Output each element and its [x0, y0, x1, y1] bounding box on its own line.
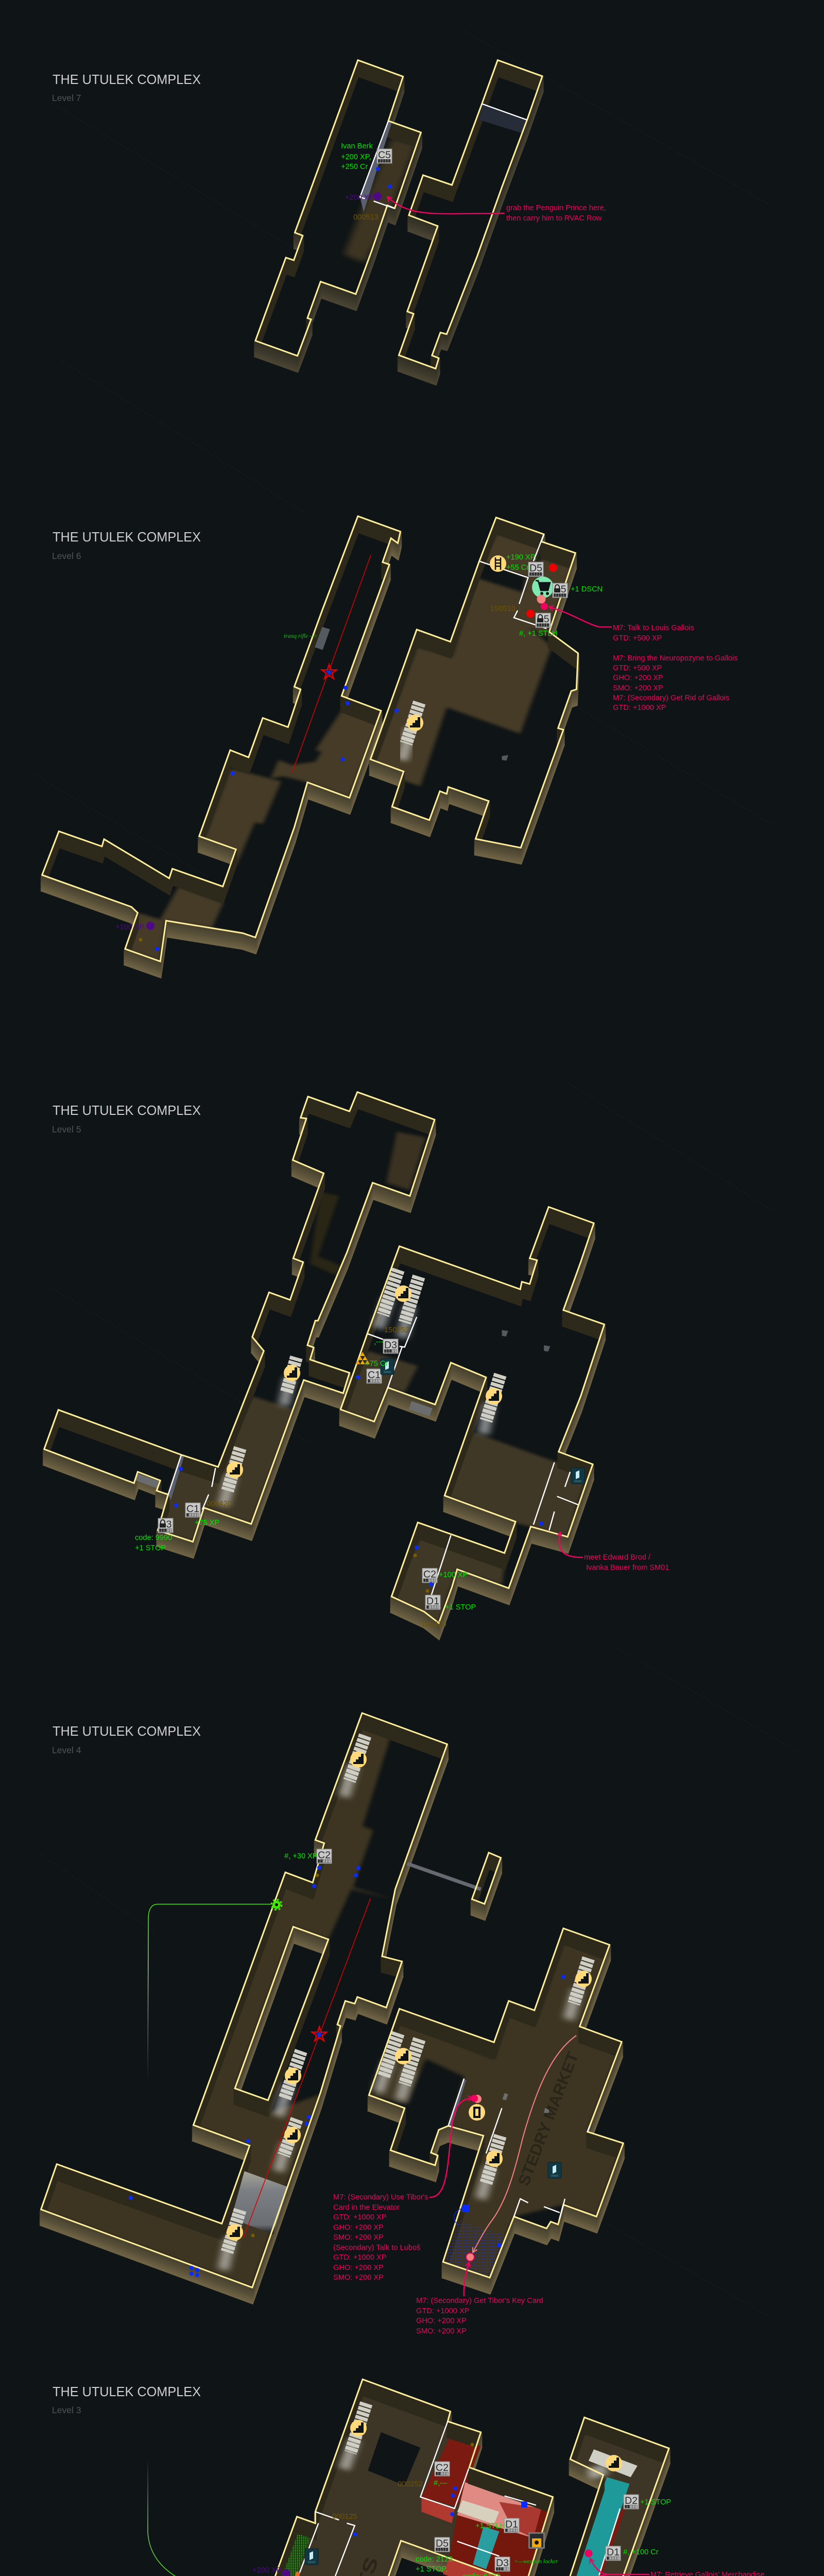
mission note: meet Edward Brod / [584, 1553, 651, 1562]
title: level 4: THE UTULEK COMPLEX [53, 1724, 201, 1739]
loot note near ladder: +190 XP, [506, 553, 537, 562]
green loot notes: +75 Cr [365, 1360, 388, 1368]
arrow to Edward Brod [559, 1532, 583, 1557]
device tile C2 north: C2 [436, 2462, 449, 2473]
green loot notes: +1 STOP [640, 2498, 671, 2506]
mission list: Tibor's card: GTD: +1000 XP [333, 2253, 386, 2262]
green loot note: Ivan Berk [341, 142, 373, 150]
gas connector line lower [148, 2459, 270, 2576]
green loot notes: +1 STOP, [416, 2565, 448, 2573]
ladder icon [490, 555, 506, 572]
safe loot note: #, +1 STLH [519, 630, 557, 638]
mission list: Tibor's card: GTD: +1000 XP [333, 2213, 386, 2222]
mission list: key card: GTD: +1000 XP [416, 2307, 469, 2315]
safe tile 3 [158, 1518, 173, 1533]
title: level 4 [52, 1724, 201, 1755]
mission list: M7: Talk to Louis Gallois [613, 624, 694, 632]
mission list: M7: Bring the Neuropozyne to Gallois [613, 654, 738, 663]
mission marker near elevator [471, 2095, 482, 2103]
title: level 7 [52, 73, 201, 103]
triangle code [355, 1352, 370, 1364]
device tile D3 [495, 2557, 510, 2571]
panel: level 5 [44, 1092, 669, 1638]
device tile C5: C5 [378, 149, 391, 161]
device tile D1 [504, 2518, 519, 2533]
safe tile lower [536, 613, 551, 628]
green loot notes: +1 STLH [475, 2522, 505, 2530]
exploration XP label: +100 XP [115, 923, 144, 931]
code numbers: 150420 [421, 1620, 447, 1629]
stairs icons [227, 1285, 502, 1478]
mission list: M7: (Secondary) Get Rid of Gallois [613, 694, 729, 702]
safe tile upper [553, 583, 568, 598]
C2 loot note: #, +30 XP [284, 1852, 318, 1860]
mission list: SMO: +200 XP [613, 684, 663, 692]
device tile D5 [435, 2537, 450, 2552]
title: level 5: Level 5 [52, 1124, 81, 1134]
mission list: GTD: +500 XP [613, 664, 662, 672]
loot note near ladder: +55 Cr [506, 564, 529, 572]
panel: level 6 [42, 516, 738, 977]
praxis kit icon [528, 2532, 545, 2549]
title: level 3: Level 3 [52, 2405, 81, 2415]
code number: 150510 [490, 605, 516, 613]
device tile D5: D5 [529, 563, 542, 574]
title: level 4: Level 4 [52, 1745, 81, 1755]
code numbers: 000252 [398, 2480, 423, 2488]
green loot notes: #,--- [434, 2479, 448, 2487]
mission list: GTD: +500 XP [613, 634, 662, 642]
green loot note: +200 XP, [341, 153, 371, 161]
device tile C2 [422, 1568, 437, 1583]
elevator icon [469, 2104, 485, 2121]
device tile D2 east: D2 [625, 2495, 638, 2506]
device tile C1 left [185, 1503, 200, 1517]
mission list: Tibor's card: Card in the Elevator [333, 2204, 400, 2212]
remote hacking dots and exploration bonus [373, 167, 392, 200]
mission list: key card: SMO: +200 XP [416, 2327, 467, 2335]
title: level 5 [52, 1104, 201, 1134]
salmon route arrow [473, 2036, 576, 2252]
green loot notes [135, 1338, 476, 1612]
code numbers [207, 1326, 447, 1629]
green loot notes [301, 2479, 671, 2576]
device tile D3 [383, 1339, 398, 1353]
green loot notes: code: 2123 [416, 2555, 453, 2564]
arrow to elevator [430, 2098, 473, 2197]
device tile D3: D3 [496, 2557, 509, 2569]
device tile C2: C2 [423, 1569, 436, 1580]
mission list: key card: M7: (Secondary) Get Tibor's Key Card [416, 2297, 543, 2305]
panel: level 3 [52, 2379, 765, 2576]
device tile D1: D1 [505, 2519, 518, 2530]
mission note: grab the Penguin Prince here, [506, 204, 606, 212]
device tile D1 east [606, 2546, 621, 2561]
device tile C1 left: C1 [186, 1503, 199, 1515]
exploration XP label: +200 XP [345, 194, 374, 202]
title: level 6 [52, 530, 201, 561]
e-books [381, 1359, 585, 1484]
title: level 3 [52, 2385, 201, 2415]
device tile D1: D1 [426, 1596, 439, 1607]
stairs icons [284, 2420, 622, 2576]
map: level 7 [255, 60, 542, 384]
safe tile lower: 5 [544, 614, 550, 625]
stairs icons [227, 1751, 592, 2241]
remote hacking and pocket dots [174, 1375, 543, 1593]
device tile D3: D3 [384, 1340, 397, 1351]
title: level 3: THE UTULEK COMPLEX [53, 2385, 201, 2399]
remote hacking and pocket dots [129, 1866, 565, 2277]
mission list: key card: GHO: +200 XP [416, 2317, 467, 2325]
remote hacking dots [139, 686, 399, 951]
code numbers: 000420 [207, 1500, 232, 1508]
map: level 5 [44, 1092, 604, 1638]
map: level 3 [246, 2379, 669, 2576]
green loot notes: code: 9990 [135, 1534, 172, 1542]
mission markers [293, 2549, 592, 2576]
gas connector line upper [148, 1904, 271, 2081]
e-books [305, 2549, 554, 2576]
mission list: Tibor's card: GHO: +200 XP [333, 2224, 384, 2232]
mission list: Tibor's card: GHO: +200 XP [333, 2264, 384, 2272]
loot DSCN: +1 DSCN [571, 585, 603, 594]
code numbers: 150252 [384, 1326, 409, 1334]
arrow to penguin prince [387, 197, 505, 214]
green loot notes: +75 XP [195, 1519, 219, 1527]
tranq rifle note: tranq rifle --> [284, 633, 317, 639]
title: level 6: THE UTULEK COMPLEX [53, 530, 201, 545]
stairs icon [407, 715, 423, 731]
green loot notes: +1 STOP [135, 1544, 166, 1552]
mission note: Ivanka Bauer from SM01 [586, 1564, 669, 1572]
device tile D5 [528, 562, 543, 577]
panel: level 4 [41, 1713, 623, 2335]
mission list: GTD: +1000 XP [613, 704, 666, 712]
arrows to merchandise [583, 2558, 649, 2576]
pocket secretary code: 000513 [353, 213, 379, 222]
device tile C2 north [435, 2462, 450, 2476]
mission list: GHO: +200 XP [613, 674, 663, 682]
device tile D2 east [624, 2495, 639, 2509]
mission list: Tibor's card: M7: (Secondary) Use Tibor's [333, 2193, 428, 2201]
title: level 6: Level 6 [52, 551, 81, 561]
market zone label: STEDRY MARKET [514, 2049, 582, 2189]
green loot notes: <—weapon locker [514, 2558, 558, 2565]
device tile D5: D5 [436, 2538, 449, 2549]
green loot notes: ,--- [374, 1338, 384, 1346]
electrified connector [454, 2208, 463, 2226]
device tile C1 centre: C1 [368, 1369, 381, 1381]
safe tile upper: 5 [561, 584, 566, 595]
electrified blue square [521, 2501, 527, 2507]
arrow to Gallois [549, 607, 612, 627]
mission list: Tibor's card: SMO: +200 XP [333, 2233, 384, 2242]
safe tile 3: 3 [166, 1519, 171, 1530]
device tile D1 [425, 1595, 440, 1609]
title: level 5: THE UTULEK COMPLEX [53, 1104, 201, 1118]
green loot notes: +100 XP [439, 1571, 468, 1579]
mission note: then carry him to RVAC Row [506, 214, 602, 223]
map: level 6 [42, 516, 578, 977]
remote hacking and pocket dots [294, 2443, 545, 2576]
device tile C2 [317, 1849, 332, 1863]
map: level 4 [41, 1713, 623, 2303]
mission list: Tibor's card: (Secondary) Talk to Luboš [333, 2244, 420, 2252]
breakable wall [294, 2571, 300, 2576]
exploration XP label: +200 XP [252, 2566, 281, 2574]
trooper marker [466, 2253, 474, 2261]
electrified blue square [462, 2205, 469, 2212]
enemies and mission marker [526, 564, 557, 618]
panel: level 7 [52, 60, 606, 384]
title: level 7: Level 7 [52, 93, 81, 103]
gas vent icon [271, 1900, 282, 1910]
drone icon [322, 665, 336, 679]
green loot notes: #, +100 Cr [623, 2548, 659, 2556]
code numbers [318, 2480, 423, 2576]
title: level 7: THE UTULEK COMPLEX [53, 73, 201, 87]
device tile C2: C2 [318, 1850, 331, 1861]
arrow to key card [464, 2262, 469, 2296]
shop icon [532, 577, 554, 598]
code numbers: 000125 [332, 2513, 357, 2521]
device tile C1 centre [367, 1369, 382, 1383]
device tile D1 east: D1 [607, 2547, 620, 2558]
green loot note: +250 Cr [341, 163, 368, 171]
e-book [548, 2162, 561, 2178]
drone icon [312, 2027, 327, 2041]
device tile C5 [377, 149, 392, 163]
mission list: Tibor's card: SMO: +200 XP [333, 2274, 384, 2282]
green loot notes: +1 STOP [445, 1603, 476, 1612]
exploration bonus [282, 2569, 290, 2576]
